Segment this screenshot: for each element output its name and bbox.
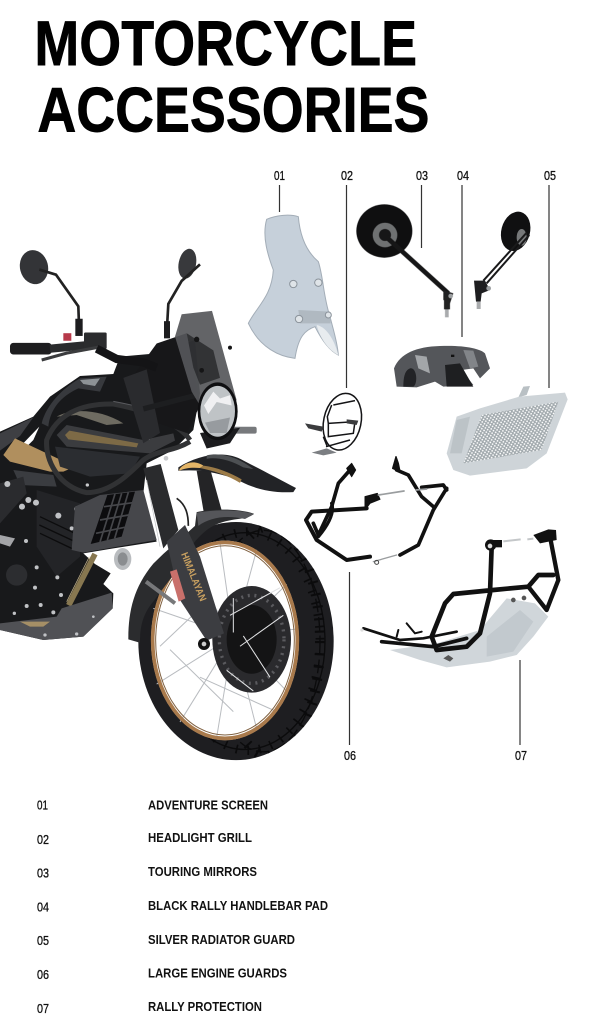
left mirror [16, 247, 83, 336]
leader line 03 [420, 185, 422, 248]
gap in frame [21, 427, 39, 447]
leader line 07 [519, 660, 521, 745]
legend row 01 [37, 798, 268, 812]
part number 04: 04 [457, 168, 469, 183]
guard tubes [363, 537, 558, 650]
part 02: headlight grill [305, 390, 367, 455]
legend row 03: 03 [37, 866, 49, 880]
part 03: touring mirrors [356, 204, 535, 317]
legend row 07 [37, 1000, 262, 1016]
crash bar [47, 376, 190, 493]
left guard [306, 463, 404, 564]
fork legs: HIMALAYAN [178, 551, 208, 603]
legend row 02: HEADLIGHT GRILL [148, 831, 252, 845]
legend row 05: 05 [37, 933, 49, 948]
legend row 06 [37, 966, 287, 982]
legend row 04 [37, 899, 328, 914]
title [34, 9, 429, 146]
engine [0, 477, 80, 615]
front mudguard [128, 510, 254, 643]
legend row 04: 04 [37, 900, 49, 914]
legend row 06: LARGE ENGINE GUARDS [148, 966, 287, 980]
legend row 04: BLACK RALLY HANDLEBAR PAD [148, 899, 328, 913]
horn [114, 548, 131, 570]
legend row 05 [37, 933, 295, 948]
skid plate [390, 598, 548, 667]
leader line 05 [548, 185, 550, 388]
legend row 03: TOURING MIRRORS [148, 865, 257, 879]
part number 02: 02 [341, 168, 353, 183]
title: ACCESSORIES [38, 75, 429, 146]
front wheel and mudguard [128, 471, 334, 760]
right touring mirror [474, 208, 535, 309]
front upper assembly [10, 247, 296, 492]
side panel [0, 417, 33, 451]
legend row 07: 07 [37, 1001, 49, 1016]
legend row 06: 06 [37, 967, 49, 982]
leader line 06 [348, 572, 350, 745]
leader line 01 [278, 185, 280, 212]
gold tank decal [3, 438, 75, 472]
part number 06: 06 [344, 748, 356, 763]
tank reflections [13, 377, 140, 487]
part 07: rally protection [360, 529, 558, 667]
part 04: black rally handlebar pad [394, 346, 490, 387]
legend row 03 [37, 865, 257, 880]
legend row 01: 01 [37, 798, 48, 812]
part 06: large engine guards [306, 457, 447, 564]
part number 05: 05 [544, 168, 556, 183]
motorcycle [0, 247, 334, 760]
part number 03: 03 [416, 168, 428, 183]
part number 01: 01 [274, 168, 285, 183]
brake disc [212, 586, 291, 693]
legend row 02: 02 [37, 832, 49, 847]
main body mass [0, 340, 200, 640]
front tyre [138, 522, 334, 760]
wheel rim and spokes [151, 541, 299, 740]
part 01: adventure screen [248, 215, 338, 358]
handlebar [10, 333, 157, 368]
leader line 02 [346, 185, 348, 388]
far fork and frame behind wheel [177, 471, 222, 526]
title: MOTORCYCLE [34, 9, 417, 79]
headlight [198, 382, 238, 440]
part number 07: 07 [515, 748, 527, 763]
upper fender [178, 454, 296, 492]
sump guard [0, 593, 113, 640]
left touring mirror [356, 204, 453, 317]
bike body [0, 340, 224, 650]
windscreen [175, 311, 237, 405]
part 05: silver radiator guard [447, 386, 568, 476]
radiator [72, 490, 157, 553]
legend row 01: ADVENTURE SCREEN [148, 798, 268, 812]
exhaust pipe [67, 554, 95, 605]
legend row 07: RALLY PROTECTION [148, 1000, 262, 1014]
right mirror [164, 247, 200, 338]
parts legend [37, 798, 328, 1016]
legend row 05: SILVER RADIATOR GUARD [148, 933, 295, 947]
steering and cables [123, 333, 257, 448]
leader line 04 [461, 185, 463, 337]
legend row 02 [37, 831, 252, 847]
right guard [393, 457, 447, 555]
fork legs [143, 464, 224, 650]
